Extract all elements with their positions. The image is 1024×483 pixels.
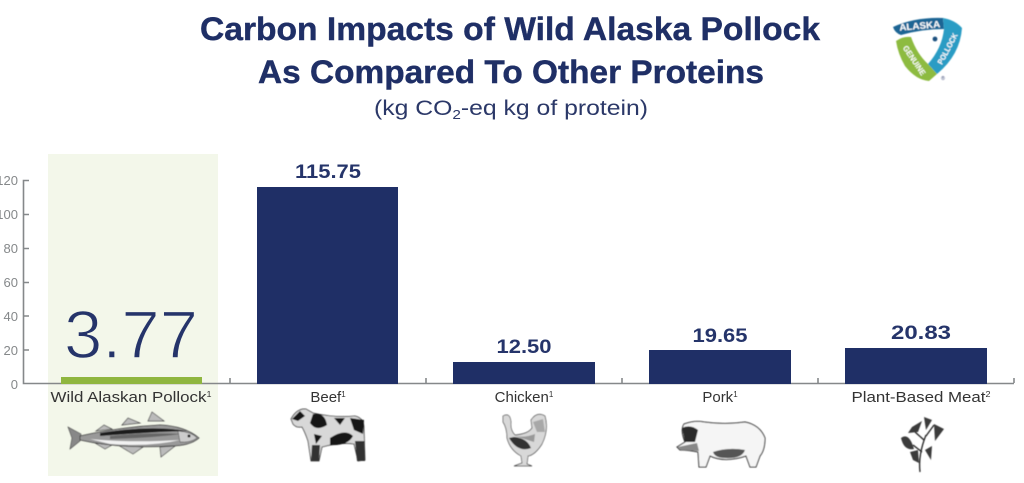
category labels: 1 [341,390,346,399]
logo: Alaska Genuine Pollock: ® [941,75,945,82]
y axis: 20 [4,343,18,358]
category labels: Wild Alaskan Pollock [50,389,189,406]
title: As Compared To Other Proteins [258,54,764,90]
logo: Alaska Genuine Pollock: ALASKA [899,19,941,34]
bar: Chicken [453,362,595,384]
title: Carbon Impacts of Wild Alaska Pollock [200,11,820,47]
subtitle: -eq kg of protein) [461,97,648,120]
icon: pig [677,421,765,467]
logo: Alaska Genuine Pollock: GENUINE [901,44,928,78]
value: Chicken: 12.50 [496,337,552,358]
y axis [0,173,1014,392]
subtitle: 2 [452,107,461,122]
y axis: 80 [4,241,18,256]
icon: plant [901,417,944,472]
y axis: 40 [4,309,18,324]
highlight panel: Wild Alaskan Pollock [48,154,218,476]
category labels: 1 [206,390,212,399]
title [200,11,820,90]
category labels: 1 [733,390,738,399]
category labels [50,389,991,406]
icon: chicken [503,414,546,466]
bar: Beef [257,187,398,384]
bar: Wild Alaskan Pollock [61,377,202,384]
category labels: Pork [702,389,733,406]
value: Pork: 19.65 [692,326,748,347]
bar: Plant-Based Meat [845,348,987,384]
value: 3.77: 3.77 [64,297,198,373]
category labels: 1 [549,390,554,399]
value: Plant-Based Meat: 20.83 [891,323,951,344]
icon: cow [291,409,365,461]
y axis: 0 [11,377,18,392]
icon: fish [68,412,199,457]
subtitle: (kg CO [374,97,441,120]
category labels: Beef [310,389,341,406]
logo: Alaska Genuine Pollock [893,18,962,82]
category labels: 2 [985,390,991,399]
logo: Alaska Genuine Pollock: POLLOCK [936,32,960,66]
y axis: 60 [4,275,18,290]
category labels: Chicken [495,389,549,406]
bar: Pork [649,350,791,384]
category labels: Plant-Based Meat [852,389,971,406]
value: Beef: 115.75 [295,162,361,183]
